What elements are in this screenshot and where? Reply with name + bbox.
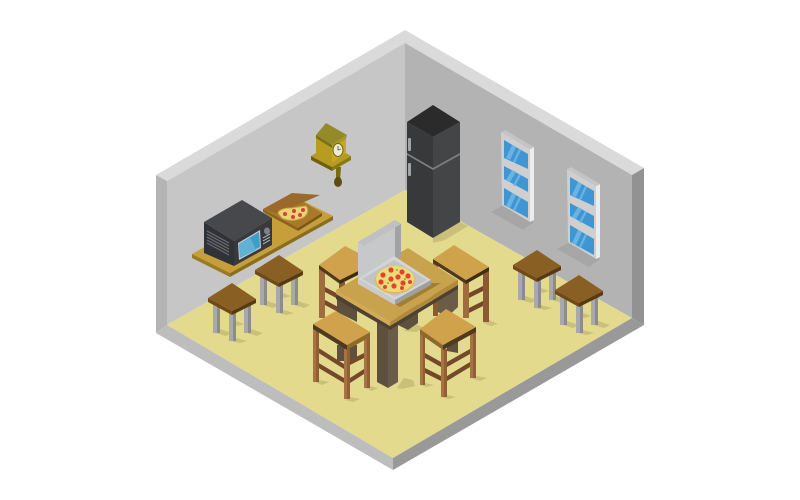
window 1	[491, 130, 534, 230]
fridge handles	[408, 138, 411, 176]
right wall end	[632, 168, 644, 325]
left wall end	[156, 175, 167, 333]
floor	[167, 190, 632, 458]
front right wooden stool	[420, 309, 487, 399]
grey stool B	[255, 255, 310, 315]
back left wooden stool	[319, 246, 376, 318]
pizza slice group	[278, 206, 308, 220]
microwave	[204, 200, 272, 266]
base	[358, 256, 431, 300]
front left wooden stool	[313, 311, 378, 402]
table	[336, 248, 458, 389]
vents	[207, 231, 229, 255]
knob	[264, 228, 270, 234]
fridge	[407, 105, 468, 243]
grey stool C	[513, 250, 568, 310]
open pizza box on table	[358, 220, 431, 305]
wall shelf	[192, 197, 333, 277]
pizza	[375, 266, 415, 294]
table shadow	[397, 378, 415, 389]
room shell	[156, 30, 644, 470]
back right wooden stool	[433, 245, 498, 326]
window 2	[557, 167, 600, 267]
buttons	[263, 234, 270, 244]
lid	[358, 220, 395, 279]
open pizza box on shelf	[263, 193, 322, 231]
floor front-left edge	[156, 325, 393, 470]
right wall	[405, 43, 632, 318]
microwave screen	[238, 230, 261, 260]
box shadow on table	[395, 283, 441, 307]
table front leg	[377, 320, 388, 388]
grey stool D	[555, 275, 610, 335]
table legs back	[404, 323, 424, 332]
grey stool A	[208, 283, 263, 343]
wall clock	[311, 123, 351, 187]
top rim of walls	[156, 30, 644, 181]
table top	[336, 248, 458, 322]
left wall	[167, 43, 405, 325]
floor front-right edge	[393, 318, 644, 470]
